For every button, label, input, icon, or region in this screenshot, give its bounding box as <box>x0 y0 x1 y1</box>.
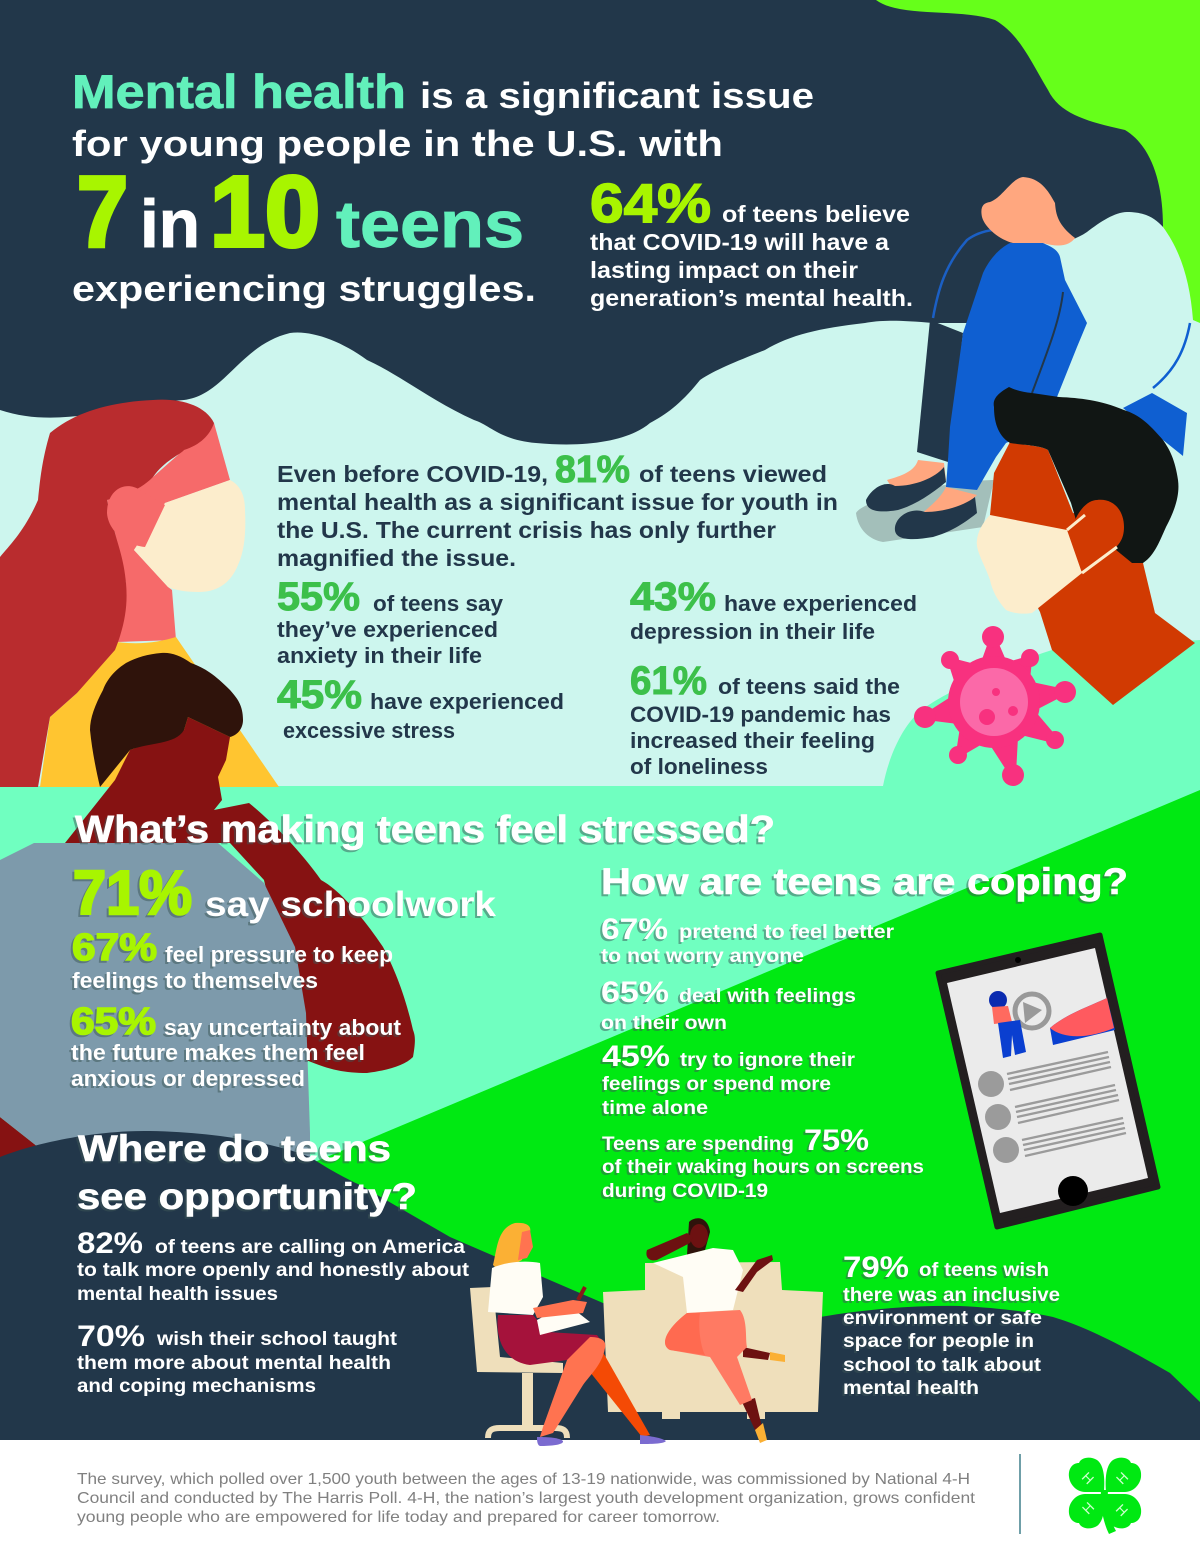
heading: mental health statement: for young people in the U.S. with <box>72 123 723 164</box>
coping stats list: feelings or spend more <box>602 1073 831 1095</box>
stat: 43 percent depression: have experienced <box>724 591 917 616</box>
stat: 43 percent depression: depression in their life <box>630 619 875 644</box>
stat: 79 percent: mental health <box>843 1377 979 1399</box>
icon: 4-H clover: H <box>1113 1469 1131 1487</box>
stat: 64 percent: generation’s mental health. <box>590 285 913 311</box>
stat: 65 percent uncertainty: say uncertainty about <box>164 1015 402 1040</box>
stat: 79 percent: space for people in <box>843 1330 1034 1352</box>
stat: 55 percent anxiety <box>277 575 504 668</box>
coping stats list: 65% <box>601 976 669 1009</box>
icon: 4-H clover <box>1069 1458 1141 1534</box>
stat: 79 percent: of teens wish <box>919 1259 1049 1281</box>
illustration: masked woman with red hair <box>0 400 279 787</box>
illustration: masked man facing left <box>977 387 1195 705</box>
illustration: man in profile with grey shirt <box>0 653 415 1170</box>
stat: 70 percent: them more about mental health <box>77 1352 391 1374</box>
stat: 81 percent: 81% <box>555 449 630 491</box>
heading: mental health statement: in <box>140 186 200 262</box>
background: bright green diagonal <box>310 790 1200 1440</box>
coping stats list: Teens are spending <box>602 1133 794 1155</box>
stat: 67 percent keep feelings: 67% <box>72 927 157 969</box>
heading: mental health statement: 10 <box>210 156 320 268</box>
coping stats list: try to ignore their <box>680 1049 855 1071</box>
stat: 81 percent: Even before COVID-19, <box>277 461 548 487</box>
stat: 82 percent: 82% <box>77 1227 143 1260</box>
stat: 43 percent depression <box>630 575 917 644</box>
coping stats list: 45% <box>602 1040 670 1073</box>
stat: 61 percent loneliness: increased their feeling <box>630 728 875 753</box>
stat: 61 percent loneliness <box>630 659 900 779</box>
stat: 79 percent: environment or safe <box>843 1307 1042 1329</box>
stat: 70 percent: 70% <box>77 1320 145 1353</box>
footer text: Council and conducted by The Harris Poll. 4-H, the nation’s largest youth development organization, grows confident <box>77 1490 976 1507</box>
stat: 81 percent: mental health as a significant issue for youth in <box>277 489 838 515</box>
heading: where do teens see opportunity <box>77 1128 417 1217</box>
stat: 65 percent uncertainty: anxious or depressed <box>71 1066 305 1091</box>
illustration: shoes over footer <box>537 1423 767 1446</box>
heading: mental health statement: experiencing struggles. <box>72 268 536 309</box>
icon: 4-H clover: H <box>1079 1499 1097 1517</box>
coping stats list: to not worry anyone <box>601 945 804 967</box>
stat: 64 percent: of teens believe <box>722 201 910 227</box>
stat: 45 percent stress: have experienced <box>370 689 564 714</box>
stat: 67 percent keep feelings: feelings to themselves <box>72 968 318 993</box>
coping stats list: time alone <box>602 1097 708 1119</box>
stat: 70 percent <box>77 1320 398 1397</box>
icon: 4-H clover: H <box>1079 1469 1097 1487</box>
stat: 55 percent anxiety: 55% <box>277 575 360 619</box>
background: navy lower section <box>0 1131 1200 1440</box>
stat: 71 percent schoolwork: 71% <box>73 859 192 928</box>
stat: 64 percent: that COVID-19 will have a <box>590 229 889 255</box>
footer text: young people who are empowered for life today and prepared for career tomorrow. <box>77 1509 720 1526</box>
stat: 79 percent: there was an inclusive <box>843 1284 1060 1306</box>
stat: 70 percent: and coping mechanisms <box>77 1375 316 1397</box>
coping stats list: on their own <box>601 1012 727 1034</box>
coping stats list: during COVID-19 <box>602 1180 768 1202</box>
icon: 4-H clover: H <box>1113 1501 1131 1519</box>
illustration: virus <box>914 626 1076 786</box>
coping stats list: 67% <box>601 913 668 946</box>
illustration: tablet <box>938 935 1158 1227</box>
stat: 79 percent <box>843 1251 1060 1399</box>
heading: how are teens coping: How are teens are coping? <box>601 861 1128 902</box>
stat: 70 percent: wish their school taught <box>156 1328 398 1350</box>
footer text: The survey, which polled over 1,500 youth between the ages of 13-19 nationwide, was commissioned by National 4-H <box>77 1471 970 1488</box>
heading: what's making teens feel stressed: What’s making teens feel stressed? <box>75 809 775 851</box>
heading: mental health statement: teens <box>336 187 524 261</box>
stat: 45 percent stress: 45% <box>277 673 362 717</box>
heading: where do teens see opportunity: see opportunity? <box>77 1176 417 1217</box>
stat: 65 percent uncertainty: the future makes them feel <box>71 1040 365 1065</box>
heading: mental health statement: Mental health <box>72 65 406 118</box>
stat: 45 percent stress <box>277 673 564 743</box>
coping stats list: deal with feelings <box>679 985 856 1007</box>
stat: 61 percent loneliness: COVID-19 pandemic has <box>630 702 891 727</box>
stat: 71 percent schoolwork: say schoolwork <box>205 885 497 924</box>
footer panel <box>0 1440 1200 1553</box>
stat: 82 percent: mental health issues <box>77 1283 278 1305</box>
stat: 79 percent: 79% <box>843 1251 909 1284</box>
stat: 82 percent: of teens are calling on America <box>155 1236 465 1258</box>
stat: 61 percent loneliness: 61% <box>630 659 707 703</box>
stat: 81 percent: the U.S. The current crisis has only further <box>277 517 776 543</box>
stat: 64 percent: 64% <box>590 172 711 234</box>
stat: 64 percent <box>590 172 913 311</box>
background: lime corner <box>860 0 1200 330</box>
footer divider <box>1019 1454 1021 1534</box>
coping stats list: 75% <box>804 1124 869 1157</box>
heading: mental health statement: is a significant issue <box>420 75 814 116</box>
stat: 45 percent stress: excessive stress <box>283 718 455 743</box>
background: aqua lower section <box>0 640 1200 1440</box>
stat: 61 percent loneliness: of teens said the <box>718 674 900 699</box>
heading: mental health statement <box>72 65 814 309</box>
stat: 79 percent: school to talk about <box>843 1354 1042 1376</box>
stat: 81 percent: of teens viewed <box>639 461 827 487</box>
stat: 81 percent <box>277 449 838 571</box>
footer text <box>77 1471 976 1526</box>
stat: 55 percent anxiety: they’ve experienced <box>277 617 498 642</box>
background: dark navy header blob <box>0 0 1163 444</box>
stat: 71 percent schoolwork <box>73 859 497 928</box>
stat: 65 percent uncertainty: 65% <box>71 1001 156 1043</box>
stat: 67 percent keep feelings: feel pressure to keep <box>165 942 393 967</box>
stat: 61 percent loneliness: of loneliness <box>630 754 768 779</box>
coping stats list: pretend to feel better <box>679 921 894 943</box>
stat: 64 percent: lasting impact on their <box>590 257 858 283</box>
illustration: therapy session with chair and couch <box>470 1218 823 1438</box>
coping stats list: of their waking hours on screens <box>602 1156 924 1178</box>
background: pale mint page <box>0 0 1200 800</box>
stat: 82 percent <box>77 1227 470 1305</box>
coping stats list <box>601 913 924 1202</box>
heading: mental health statement: 7 <box>77 156 128 268</box>
stat: 55 percent anxiety: anxiety in their life <box>277 643 482 668</box>
stat: 81 percent: magnified the issue. <box>277 545 516 571</box>
illustration: seated teen <box>856 177 1190 542</box>
stat: 43 percent depression: 43% <box>630 575 716 619</box>
stat: 55 percent anxiety: of teens say <box>373 591 504 616</box>
stat: 67 percent keep feelings <box>72 927 393 993</box>
stat: 65 percent uncertainty <box>71 1001 402 1091</box>
heading: where do teens see opportunity: Where do teens <box>78 1128 391 1169</box>
background: pale mint blob behind seated teen <box>1040 212 1200 660</box>
stat: 82 percent: to talk more openly and honestly about <box>77 1259 470 1281</box>
